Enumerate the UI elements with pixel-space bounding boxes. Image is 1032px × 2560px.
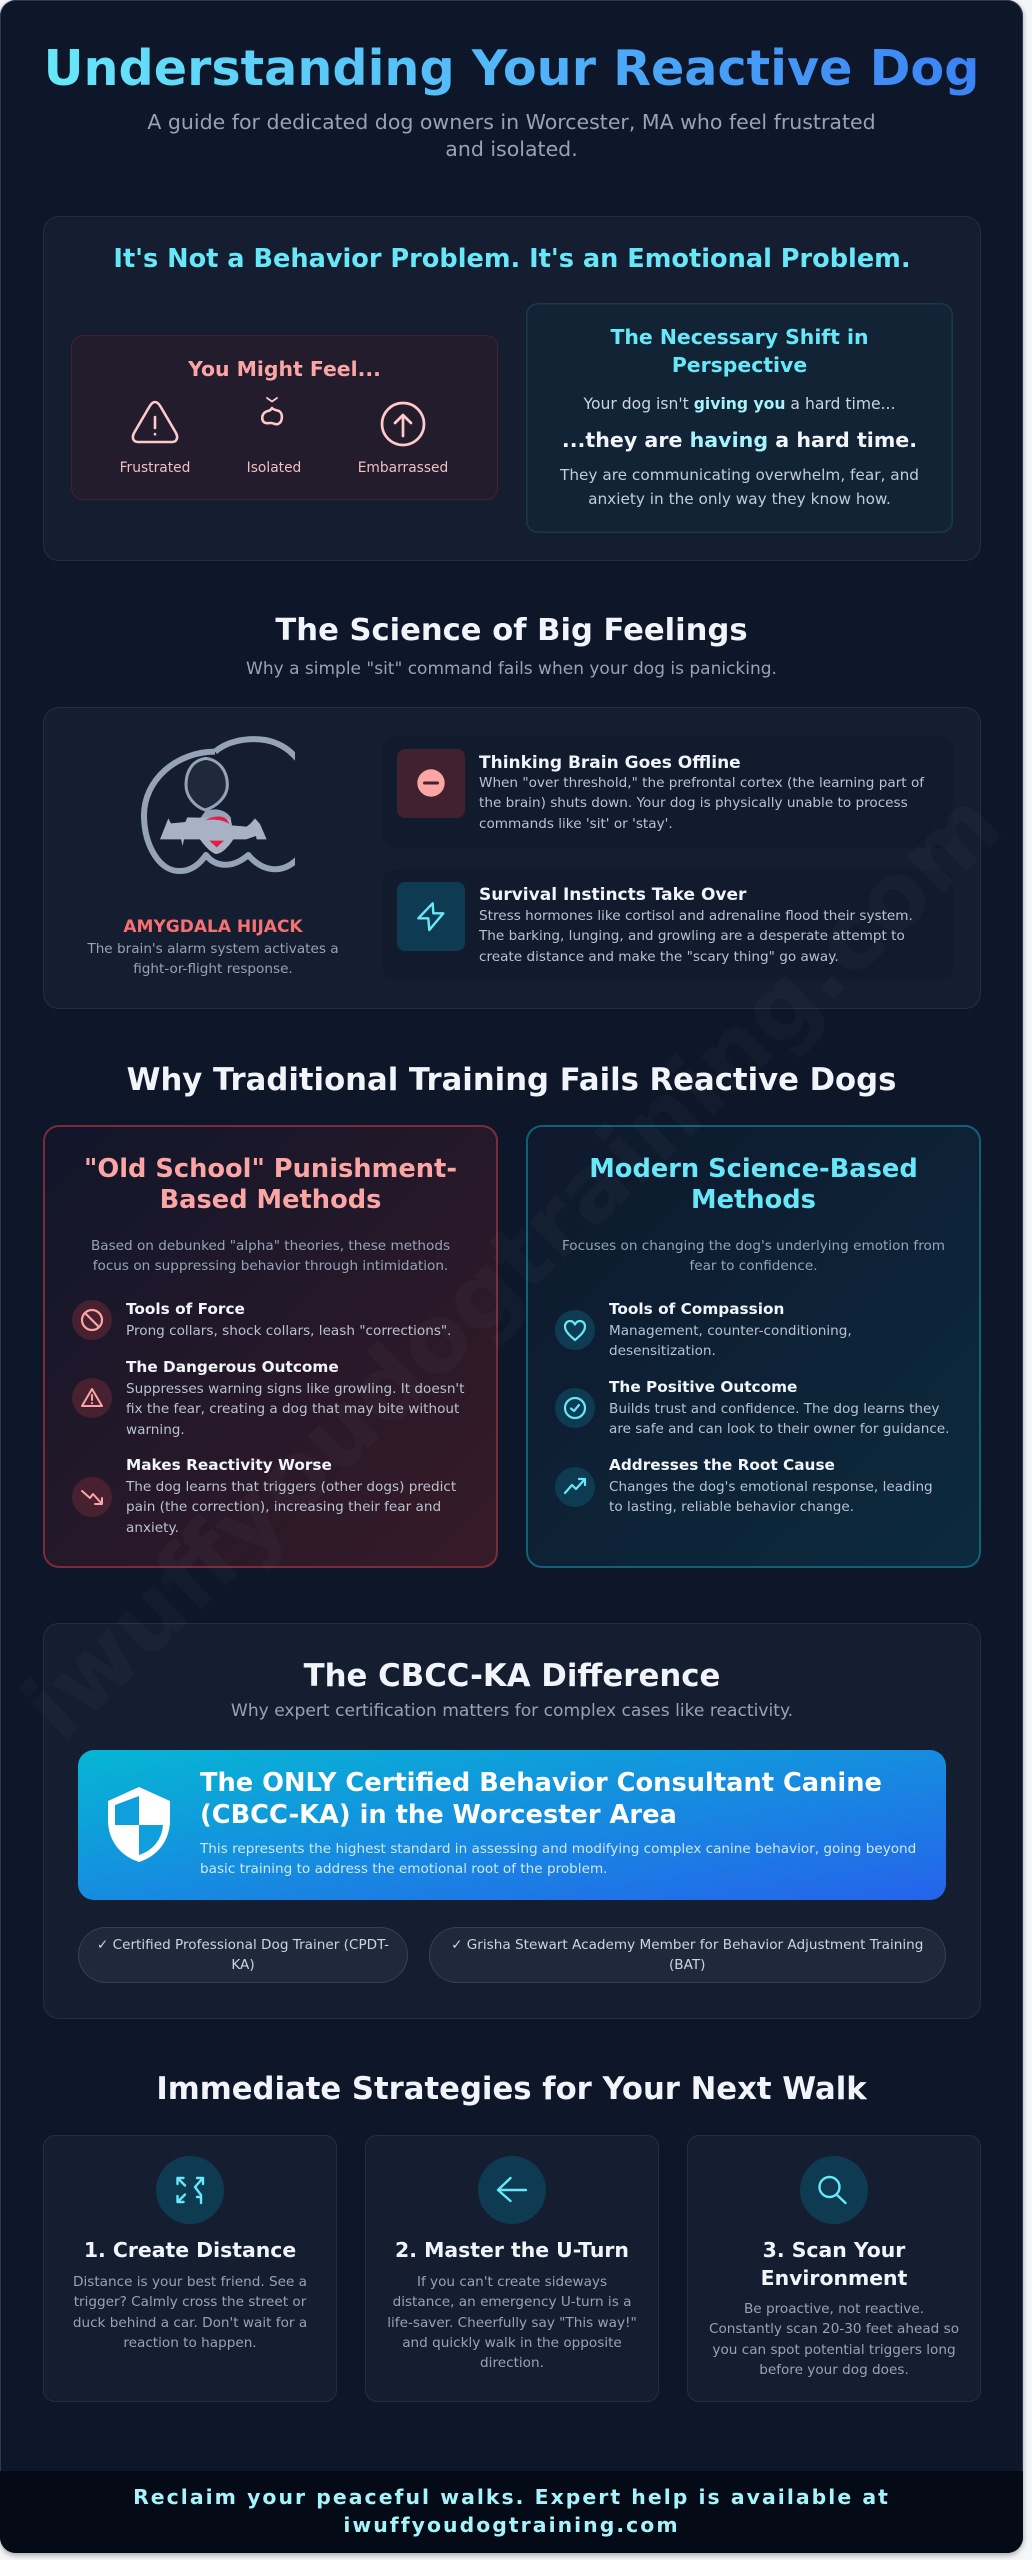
text: create distance: trigger? Calmly cross the street or	[74, 2294, 306, 2310]
subheading: cbcc-ka: Why expert certification matters for complex cases like reactivity.	[231, 1701, 793, 1721]
heading: emotional problem: It's Not a Behavior Problem. It's an Emotional Problem.	[113, 244, 911, 274]
text: reclaim your walks: iwuffyoudogtraining.com	[343, 2513, 680, 2537]
badge: bat	[428, 1927, 946, 1983]
text: communicating overwhelm: anxiety in the only way they know how.	[588, 490, 891, 508]
label: frustrated: Frustrated	[120, 460, 190, 476]
text: dangerous outcome: Suppresses warning signs like growling. It doesn't	[126, 1381, 465, 1397]
text: scan environment: before your dog does.	[759, 2362, 909, 2378]
text: thinking brain description: When "over threshold," the prefrontal cortex (the learning part of	[479, 775, 924, 791]
item: tools of force	[72, 1300, 452, 1340]
title: root cause: Addresses the Root Cause	[609, 1456, 835, 1474]
title: tools of compassion: Tools of Compassion	[609, 1300, 784, 1318]
text: root cause	[609, 1479, 933, 1515]
text: root cause: Changes the dog's emotional response, leading	[609, 1479, 933, 1495]
text: u-turn: If you can't create sideways	[417, 2274, 607, 2290]
label: embarrassed: Embarrassed	[358, 460, 448, 476]
text: u-turn: and quickly walk in the opposite	[402, 2335, 622, 2351]
title: Understanding Your Reactive Dog	[44, 39, 979, 97]
text: survival description: The barking, lunging, and growling are a desperate attempt to	[479, 928, 905, 944]
text: old school intro: focus on suppressing behavior through intimidation.	[93, 1258, 448, 1274]
title: scan environment: 3. Scan Your	[763, 2238, 905, 2262]
subtitle: A guide for dedicated dog owners in Worcester, MA who feel frustrated	[147, 110, 876, 134]
icon: shield	[108, 1787, 170, 1862]
title: create distance: 1. Create Distance	[84, 2238, 296, 2262]
panel: old school methods	[43, 1125, 498, 1568]
text: create distance: duck behind a car. Don't wait for a	[73, 2315, 307, 2331]
text: bat: ✓ Grisha Stewart Academy Member for Behavior Adjustment Training	[451, 1937, 923, 1953]
text: amygdala description: The brain's alarm system activates a	[87, 941, 339, 957]
label: isolated: Isolated	[247, 460, 301, 476]
icon: warning	[72, 1378, 112, 1418]
text: create distance	[73, 2274, 307, 2351]
icon: isolated knot	[261, 397, 284, 426]
subtitle: and isolated.	[445, 137, 578, 161]
panel: science	[43, 707, 981, 1009]
text: reclaim your walks: Reclaim your peaceful walks. Expert help is available at	[133, 2485, 890, 2509]
text: u-turn: life-saver. Cheerfully say "This way!"	[387, 2315, 637, 2331]
text: tools of compassion: Management, counter-conditioning,	[609, 1323, 852, 1339]
subheading: science: Why a simple "sit" command fails when your dog is panicking.	[246, 659, 777, 679]
item: tools of compassion	[555, 1300, 852, 1359]
text: positive outcome	[609, 1401, 949, 1437]
footer call to action	[0, 2471, 1023, 2553]
text: survival description: create distance and make the "scary thing" go away.	[479, 949, 839, 965]
title: u-turn: 2. Master the U-Turn	[395, 2238, 629, 2262]
panel: cbcc-ka difference	[43, 1623, 981, 2019]
panel: necessary shift in perspective	[526, 303, 953, 533]
item: survival instincts	[383, 869, 953, 980]
text: highest standard: This represents the highest standard in assessing and modifying complex canine behavior, going beyond	[200, 1841, 916, 1857]
text: survival description	[478, 908, 913, 965]
text: survival description: Stress hormones like cortisol and adrenaline flood their system.	[479, 908, 913, 924]
icon: left arrow	[478, 2156, 546, 2224]
text: u-turn	[387, 2274, 637, 2371]
icon: minus circle	[397, 749, 465, 818]
text: dangerous outcome: fix the fear, creating a dog that may bite without	[126, 1401, 459, 1417]
text: highest standard: basic training to address the emotional root of the problem.	[200, 1861, 608, 1877]
title: only certified	[200, 1768, 882, 1830]
icon: trend down	[72, 1477, 112, 1517]
icon: brain with amygdala	[141, 736, 295, 874]
icon: heart	[555, 1310, 595, 1350]
heading: modern methods: Methods	[691, 1184, 816, 1214]
text: having a hard time: ...they are having a hard time.	[562, 428, 917, 452]
text: tools of compassion	[609, 1323, 852, 1359]
text: amygdala description: fight-or-flight response.	[133, 961, 293, 977]
text: positive outcome: Builds trust and confidence. The dog learns they	[609, 1401, 939, 1417]
text: reactivity worse: anxiety.	[126, 1520, 179, 1536]
badge: cpdt-ka	[78, 1927, 408, 1983]
item: positive outcome	[555, 1378, 949, 1437]
text: reactivity worse: The dog learns that triggers (other dogs) predict	[126, 1479, 456, 1495]
text: thinking brain description	[479, 775, 924, 832]
title: survival instincts: Survival Instincts Take Over	[479, 884, 746, 904]
icon: trend up	[555, 1467, 595, 1507]
subtitle	[147, 110, 876, 161]
title: scan environment: Environment	[761, 2266, 907, 2290]
title: dangerous outcome: The Dangerous Outcome	[126, 1358, 339, 1376]
text: cpdt-ka: KA)	[231, 1957, 255, 1973]
heading: necessary shift	[610, 325, 869, 377]
heading: amygdala hijack: AMYGDALA HIJACK	[123, 917, 303, 937]
panel: modern science based methods	[526, 1125, 981, 1568]
heading: you might feel: You Might Feel...	[188, 357, 381, 381]
title: scan environment	[761, 2238, 907, 2290]
heading: old school: Based Methods	[160, 1184, 381, 1214]
text: create distance: reaction to happen.	[123, 2335, 257, 2351]
heading: old school: "Old School" Punishment-	[84, 1154, 457, 1184]
text: bat: (BAT)	[669, 1957, 705, 1973]
heading: immediate strategies: Immediate Strategies for Your Next Walk	[156, 2072, 867, 2106]
card: scan your environment	[687, 2135, 981, 2402]
panel: you might feel	[71, 335, 498, 500]
text: reactivity worse	[126, 1479, 456, 1536]
text: scan environment: you can spot potential triggers long	[712, 2342, 956, 2358]
heading: necessary shift: Perspective	[672, 353, 807, 377]
text: highest standard	[200, 1841, 916, 1877]
text: tools of force: Prong collars, shock collars, leash "corrections".	[126, 1323, 452, 1339]
icon: frustrated warning triangle	[132, 400, 178, 444]
text: create distance: Distance is your best friend. See a	[73, 2274, 307, 2290]
title: tools of force: Tools of Force	[126, 1300, 245, 1318]
title: only certified: The ONLY Certified Behavior Consultant Canine	[200, 1768, 882, 1798]
item: dangerous outcome	[72, 1358, 465, 1438]
text: scan environment	[709, 2301, 959, 2378]
text: thinking brain description: the brain) shuts down. Your dog is physically unable to process	[479, 795, 908, 811]
text: reclaim your walks	[133, 2485, 890, 2537]
text: giving you: Your dog isn't giving you a hard time...	[584, 395, 895, 413]
text: modern intro: fear to confidence.	[689, 1258, 818, 1274]
title: reactivity worse: Makes Reactivity Worse	[126, 1456, 332, 1474]
text: bat	[451, 1937, 923, 1973]
icon: magnifying glass	[800, 2156, 868, 2224]
text: old school intro	[91, 1238, 450, 1274]
heading: cbcc-ka: The CBCC-KA Difference	[304, 1658, 720, 1694]
text: old school intro: Based on debunked "alpha" theories, these methods	[91, 1238, 450, 1254]
text: thinking brain description: commands like 'sit' or 'stay'.	[479, 816, 673, 832]
icon: ban	[72, 1300, 112, 1340]
card: create distance	[43, 2135, 337, 2402]
heading: science of big feelings: The Science of Big Feelings	[275, 613, 748, 648]
text: amygdala description	[87, 941, 339, 977]
icon: lightning bolt	[397, 882, 465, 951]
text: communicating overwhelm	[560, 466, 919, 508]
item: makes reactivity worse	[72, 1456, 456, 1536]
text: scan environment: Be proactive, not reactive.	[744, 2301, 924, 2317]
text: scan environment: Constantly scan 20-30 feet ahead so	[709, 2321, 959, 2337]
heading: modern methods: Modern Science-Based	[589, 1154, 918, 1184]
item: thinking brain offline	[383, 736, 953, 848]
heading: why traditional training fails: Why Traditional Training Fails Reactive Dogs	[127, 1062, 896, 1098]
text: cpdt-ka	[97, 1937, 389, 1973]
text: communicating overwhelm: They are communicating overwhelm, fear, and	[560, 466, 919, 484]
card: master the u-turn	[365, 2135, 659, 2402]
title: only certified: (CBCC-KA) in the Worcester Area	[200, 1800, 677, 1830]
heading: old school	[84, 1154, 457, 1214]
icon: expand arrows	[156, 2156, 224, 2224]
watermark: iwuffyoudogtraining.com	[2, 770, 1022, 1760]
title: positive outcome: The Positive Outcome	[609, 1378, 797, 1396]
text: positive outcome: are safe and can look to their owner for guidance.	[609, 1421, 949, 1437]
icon: check circle	[555, 1388, 595, 1428]
text: dangerous outcome	[126, 1381, 465, 1438]
text: reactivity worse: pain (the correction), increasing their fear and	[126, 1499, 441, 1515]
text: cpdt-ka: ✓ Certified Professional Dog Trainer (CPDT-	[97, 1937, 389, 1953]
text: u-turn: direction.	[480, 2355, 544, 2371]
text: root cause: to lasting, reliable behavior change.	[609, 1499, 854, 1515]
text: modern intro: Focuses on changing the dog's underlying emotion from	[562, 1238, 945, 1254]
text: modern intro	[562, 1238, 945, 1274]
text: tools of compassion: desensitization.	[609, 1343, 716, 1359]
title: thinking brain: Thinking Brain Goes Offline	[479, 752, 741, 772]
panel: not a behavior problem	[43, 216, 981, 561]
icon: embarrassed arrow circle	[380, 402, 426, 446]
text: dangerous outcome: warning.	[126, 1422, 185, 1438]
heading: necessary shift: The Necessary Shift in	[610, 325, 869, 349]
text: u-turn: distance, an emergency U-turn is a	[393, 2294, 631, 2310]
item: root cause	[555, 1456, 933, 1515]
callout: only certified consultant	[78, 1750, 946, 1900]
heading: modern methods	[589, 1154, 918, 1214]
